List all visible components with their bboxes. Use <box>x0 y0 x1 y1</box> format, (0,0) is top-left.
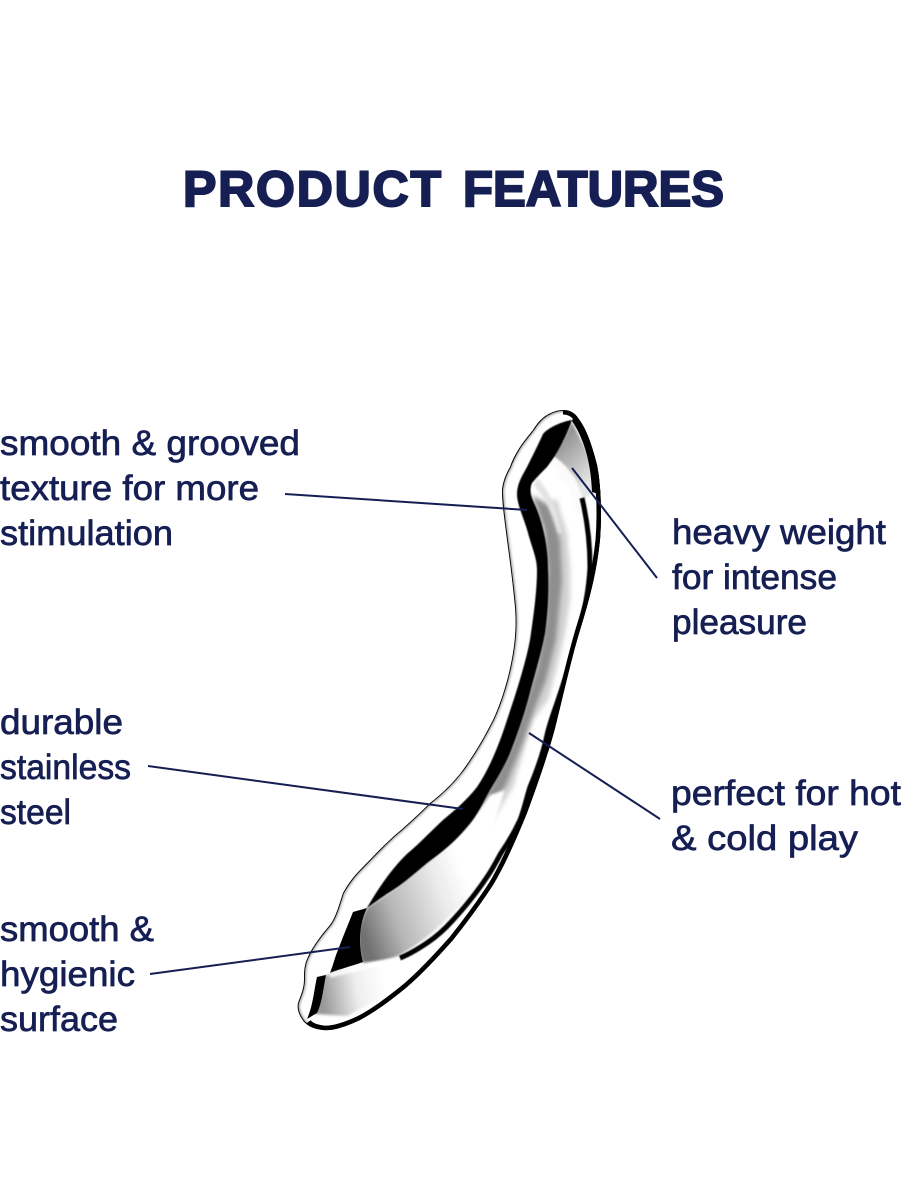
shaft inner ridge <box>534 478 562 533</box>
grey shaft, light <box>490 498 572 816</box>
foot black facet <box>307 975 326 1019</box>
text: heavy weight: pleasure <box>672 603 807 642</box>
text: durable stainless steel: durable <box>0 703 123 742</box>
text: smooth and hygienic surface: surface <box>0 1000 118 1039</box>
soft edge shading <box>298 410 601 1030</box>
text: smooth and grooved texture: smooth & grooved <box>0 424 300 463</box>
text: heavy weight: for intense <box>672 558 837 597</box>
title <box>183 161 724 217</box>
callout line: hygienic surface <box>150 947 350 974</box>
text: smooth and hygienic surface <box>0 910 154 1039</box>
text: durable stainless steel: steel <box>0 793 71 832</box>
product: curved stainless steel wand <box>298 410 602 1030</box>
callout line: stainless steel <box>148 766 463 809</box>
title: FEATURES <box>463 161 724 217</box>
tip grey facet <box>359 790 505 963</box>
callout line: heavy weight <box>572 468 657 578</box>
tip black facet <box>330 908 367 973</box>
text: smooth and grooved texture: texture for more <box>0 469 259 508</box>
text: smooth and hygienic surface: hygienic <box>0 955 135 994</box>
text: smooth and grooved texture: stimulation <box>0 514 173 553</box>
title: PRODUCT <box>183 161 441 217</box>
text: hot and cold play: & cold play <box>671 819 859 858</box>
inner black line <box>400 498 590 958</box>
text: heavy weight: heavy weight <box>672 513 886 552</box>
text: smooth and hygienic surface: smooth & <box>0 910 154 949</box>
main black reflection <box>367 420 572 908</box>
foot grey facet <box>314 968 373 1017</box>
text: durable stainless steel: stainless <box>0 748 131 787</box>
grey shaft, dark beside reflection <box>420 494 564 870</box>
white rim between tip and foot <box>328 910 458 978</box>
text: hot and cold play: perfect for hot <box>671 774 901 813</box>
head grey facet <box>552 422 593 500</box>
text: smooth and grooved texture <box>0 424 300 553</box>
outer black edge <box>298 410 601 1030</box>
top-right black crescent <box>572 412 602 495</box>
head inner ridge <box>554 456 578 484</box>
text: heavy weight <box>672 513 886 642</box>
text: durable stainless steel <box>0 703 131 832</box>
text: hot and cold play <box>671 774 901 858</box>
callout line: grooved texture <box>285 494 527 510</box>
callout line: hot and cold <box>529 733 660 819</box>
